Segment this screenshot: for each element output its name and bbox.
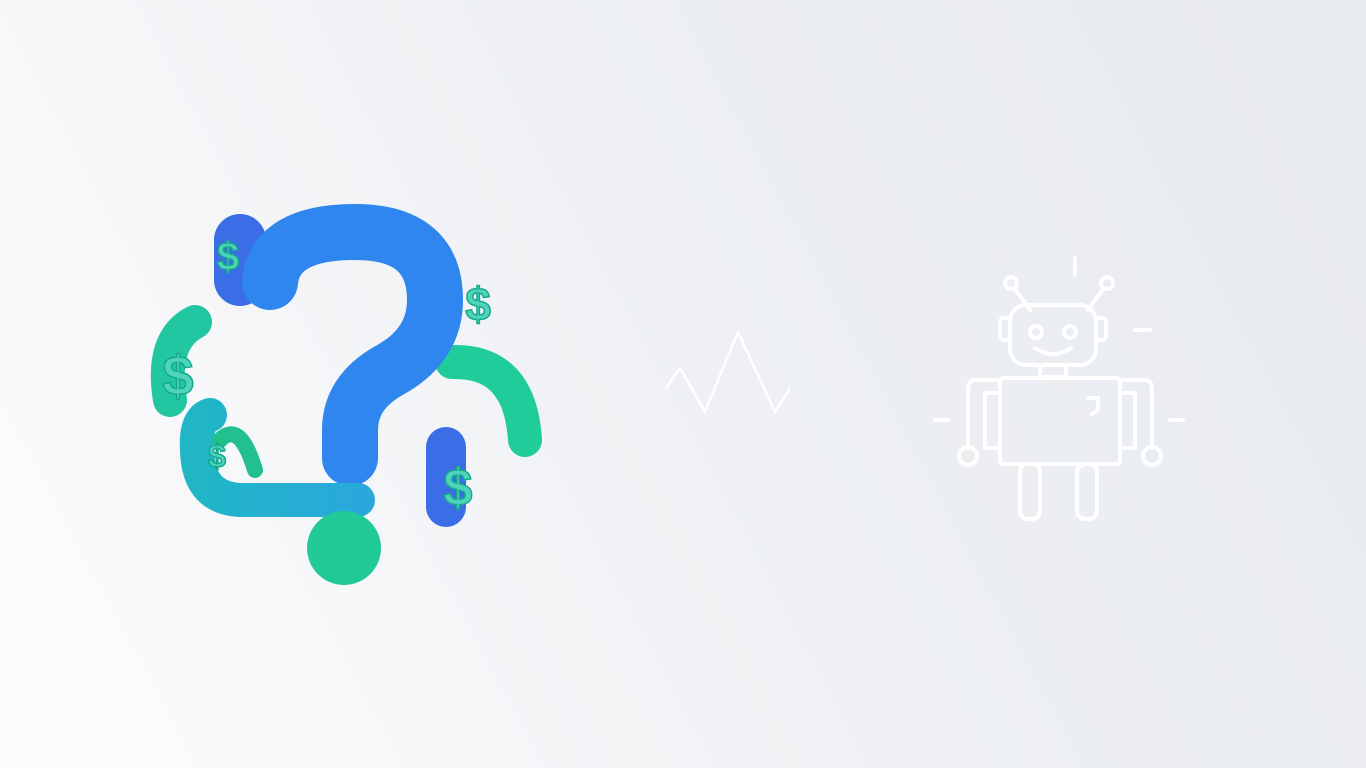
small inner green arc [220,434,255,470]
dollar signs: $ [444,459,473,517]
icon: zigzag A [666,332,790,412]
dollar signs [162,235,491,517]
dollar signs: $ [162,344,194,407]
blue small pill [426,427,466,527]
teal hook [197,415,358,500]
green bottom circle [307,511,381,585]
icon: question mark with dollar signs [162,214,525,585]
dollar signs: $ [217,235,239,279]
left blue pill [214,214,266,306]
dollar signs: $ [208,438,226,474]
question mark arc [270,232,435,458]
dollar signs: $ [465,278,491,330]
green left blob [168,322,195,400]
icon: robot [935,258,1183,519]
green arc right [452,362,525,440]
